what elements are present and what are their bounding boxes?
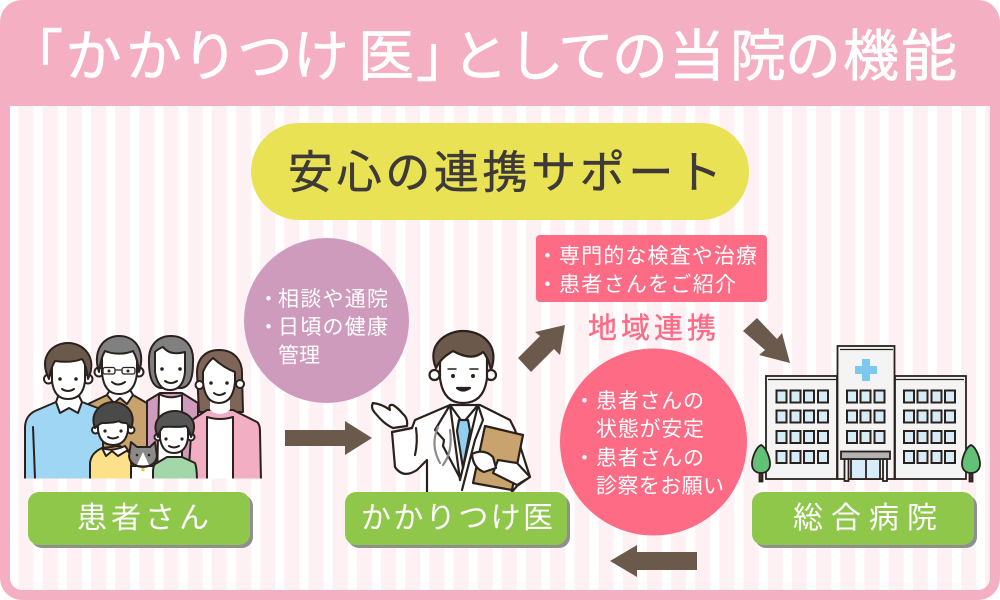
button: 総合病院: 総合病院 xyxy=(793,502,937,535)
title: 「かかりつけ医」としての当院の機能 xyxy=(7,25,957,88)
doctor eyes xyxy=(451,374,475,378)
red circle: patient return: 状態が安定 xyxy=(596,418,704,441)
coat arm crease xyxy=(415,428,417,455)
purple circle: consultation xyxy=(244,238,409,403)
purple circle: consultation: 管理 xyxy=(278,344,320,368)
family faces xyxy=(58,367,229,456)
red circle: patient return: 患者さんの xyxy=(596,447,704,470)
doctor shirt and tie xyxy=(450,405,478,480)
coat cuff xyxy=(392,428,412,432)
doctor holding hand xyxy=(472,452,496,472)
doctor sleeve xyxy=(493,460,530,485)
grandmother xyxy=(147,336,198,482)
grandfather xyxy=(88,335,146,465)
woman xyxy=(188,350,261,482)
red circle: patient return xyxy=(560,348,747,536)
red circle: patient return: ・ xyxy=(574,390,595,413)
red box: hospital referral xyxy=(536,235,767,302)
windows xyxy=(776,390,955,463)
button: 総合病院 xyxy=(752,492,977,548)
arrow: hospital to doctor (left) xyxy=(610,545,697,577)
man xyxy=(25,343,103,482)
entrance xyxy=(841,452,890,481)
purple circle: consultation: ・ xyxy=(258,316,279,339)
purple circle: consultation: ・ xyxy=(258,288,279,311)
roof lines xyxy=(768,350,964,380)
red box: hospital referral: ・ xyxy=(537,274,558,296)
clipboard xyxy=(473,426,523,490)
doctor raised hand xyxy=(372,403,407,428)
purple circle: consultation: 日頃の健康 xyxy=(278,316,388,339)
boy xyxy=(153,411,197,482)
right wing xyxy=(895,376,966,479)
doctor coat xyxy=(392,405,530,500)
red circle: patient return: 診察をお願い xyxy=(596,475,724,498)
red box: hospital referral: 患者さんをご紹介 xyxy=(559,274,736,296)
stethoscope xyxy=(434,427,451,465)
heading pill: 安心の連携サポート: 安心の連携サポート xyxy=(288,147,722,198)
illustration: family xyxy=(25,336,261,482)
illustration: hospital xyxy=(752,346,980,482)
red box: hospital referral: 専門的な検査や治療 xyxy=(559,245,757,268)
button: かかりつけ医 xyxy=(345,492,570,548)
purple circle: consultation: 相談や通院 xyxy=(278,288,388,311)
arrow: hospital referral (down-right) xyxy=(743,318,790,363)
button: 患者さん xyxy=(28,492,253,548)
red box: hospital referral: ・ xyxy=(537,245,558,268)
centre tower xyxy=(838,346,894,479)
red circle: patient return: 患者さんの xyxy=(596,390,704,413)
left wing xyxy=(766,376,837,479)
arrow: doctor to hospital (up-right) xyxy=(518,325,565,372)
button: 患者さん: 患者さん xyxy=(77,502,209,535)
coat lapels xyxy=(435,405,483,490)
striped content background xyxy=(10,106,990,590)
doctor head xyxy=(430,331,496,403)
arrow: patient to doctor xyxy=(285,421,372,455)
cross xyxy=(855,359,877,381)
button: かかりつけ医: かかりつけ医 xyxy=(361,502,553,535)
illustration: doctor xyxy=(372,331,530,500)
tree left xyxy=(752,445,770,482)
girl xyxy=(90,402,134,482)
red circle: patient return: ・ xyxy=(574,447,595,470)
tree right xyxy=(962,445,980,482)
cat xyxy=(129,442,157,482)
heading pill: 安心の連携サポート xyxy=(251,123,749,220)
label: 地域連携: 地域連携 xyxy=(588,312,716,345)
